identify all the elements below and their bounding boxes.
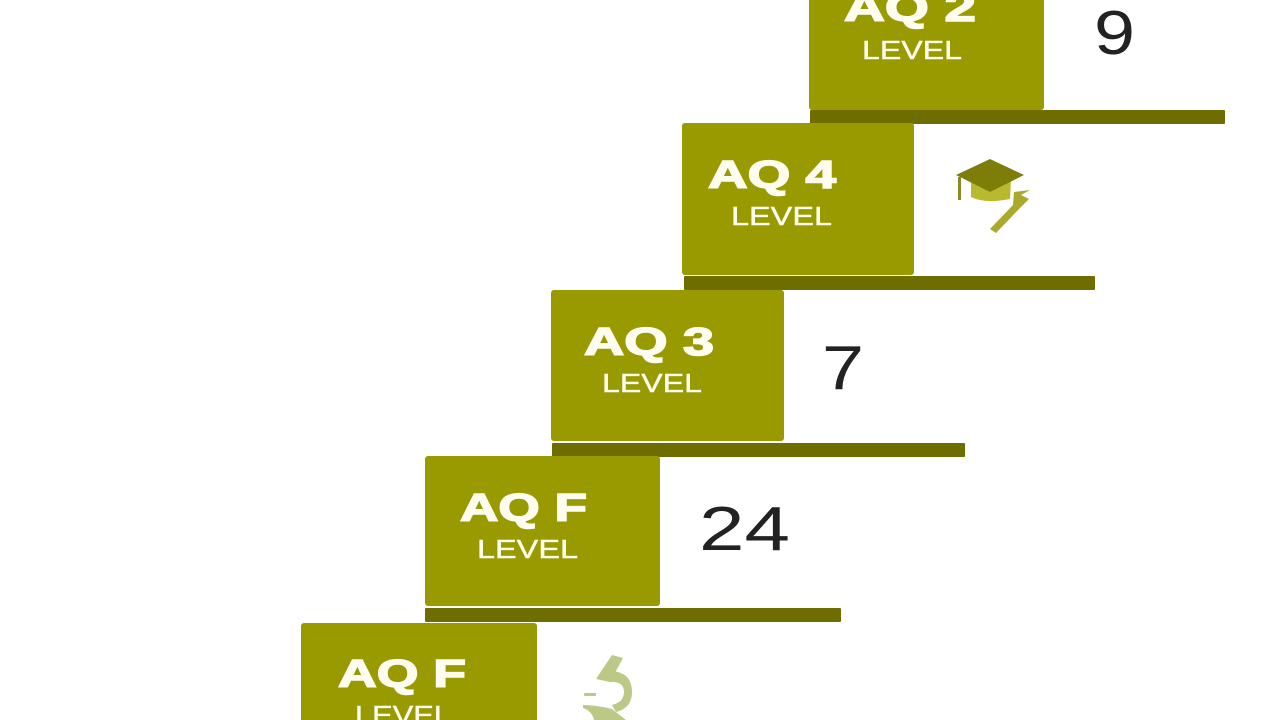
heading: AQ F: AQ F xyxy=(460,487,587,530)
label: LEVEL: LEVEL xyxy=(731,201,832,231)
number: 7: 7 xyxy=(822,334,864,403)
panel: AQ 3 block xyxy=(551,290,784,441)
label: LEVEL: LEVEL xyxy=(602,368,702,398)
icon: microscope xyxy=(583,655,632,720)
panel: AQ F block xyxy=(301,623,537,720)
heading: AQ F: AQ F xyxy=(338,653,466,696)
heading: AQ 3: AQ 3 xyxy=(584,321,714,364)
number: 24: 24 xyxy=(699,495,790,564)
label: LEVEL: LEVEL xyxy=(862,35,962,65)
label: LEVEL: LEVEL xyxy=(477,534,578,564)
heading: AQ 4: AQ 4 xyxy=(708,154,836,197)
step: AQ 4 level xyxy=(682,123,1095,290)
panel: AQ 4 block xyxy=(682,123,914,275)
number: 9: 9 xyxy=(1094,0,1135,68)
step: AQ F level lower xyxy=(301,623,632,720)
shelf: AQ 2 xyxy=(810,110,1225,124)
panel: AQ F block xyxy=(425,456,660,606)
shelf: AQ F xyxy=(425,608,841,622)
icon: graduation cap and wrench xyxy=(956,159,1030,233)
shelf: AQ 3 xyxy=(552,443,965,457)
step: AQ 3 level xyxy=(551,290,965,457)
panel: AQ 2 block xyxy=(809,0,1044,110)
step: AQ F level upper xyxy=(425,456,841,622)
shelf: AQ 4 xyxy=(684,276,1095,290)
step: AQ 2 level xyxy=(809,0,1225,124)
